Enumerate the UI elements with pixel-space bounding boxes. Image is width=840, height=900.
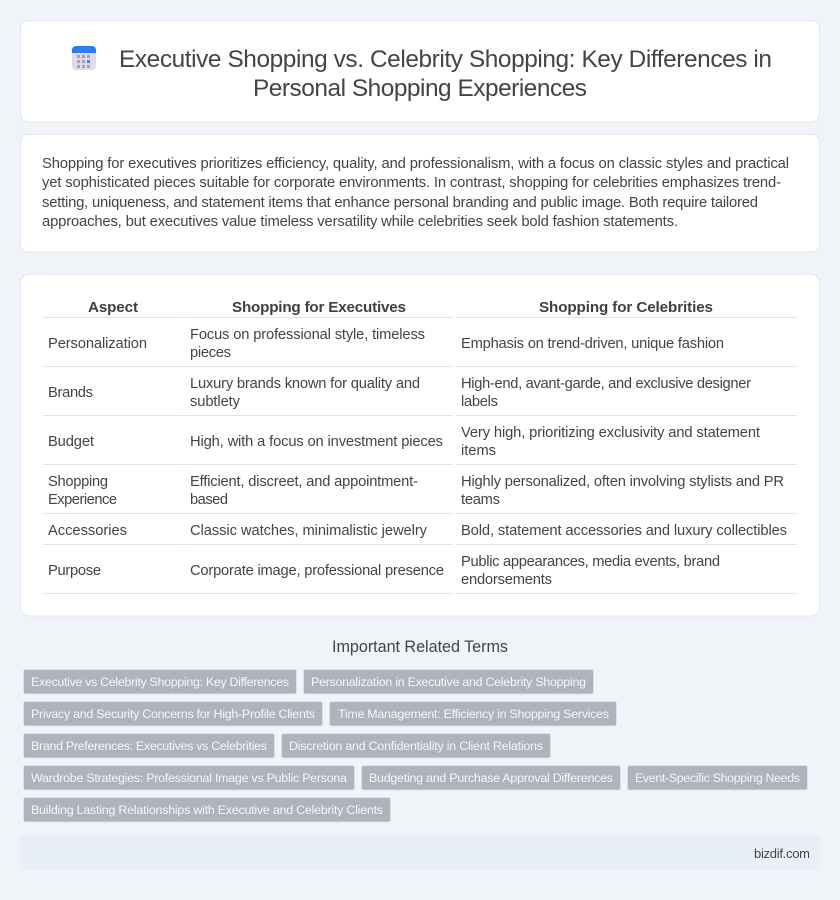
tag: Budgeting and Purchase Approval Differences [369, 771, 613, 785]
row: purpose [48, 554, 720, 588]
tag: Event-Specific Shopping Needs [635, 771, 800, 785]
table header: Shopping for Executives [232, 299, 406, 316]
tags: related terms [24, 670, 808, 822]
row: budget: High, with a focus on investment pieces [190, 434, 443, 450]
row: purpose: Corporate image, professional presence [190, 563, 444, 579]
footer [20, 836, 820, 870]
tag [330, 702, 616, 726]
tag: Discretion and Confidentiality in Client Relations [289, 739, 543, 753]
title: Executive Shopping vs. Celebrity Shopping: Key Differences in [119, 46, 772, 73]
row: brands: High-end, avant-garde, and exclusive designer [461, 376, 751, 392]
row: shopping experience: teams [461, 492, 500, 508]
row: personalization: Personalization [48, 336, 147, 352]
panel: header [20, 20, 820, 122]
text block: introduction [42, 156, 789, 230]
row: brands: subtlety [190, 394, 241, 410]
row: shopping experience: based [190, 492, 228, 508]
tag [24, 702, 322, 726]
tag: Wardrobe Strategies: Professional Image vs Public Persona [31, 771, 347, 785]
table header [88, 299, 713, 316]
row: purpose: Public appearances, media events, brand [461, 554, 720, 570]
tag [24, 670, 296, 694]
tag [282, 734, 550, 758]
tag: Personalization in Executive and Celebrity Shopping [311, 675, 586, 689]
row: brands: Brands [48, 385, 93, 401]
tag: Brand Preferences: Executives vs Celebrities [31, 739, 267, 753]
tag: Executive vs Celebrity Shopping: Key Differences [31, 675, 289, 689]
row: personalization [48, 327, 724, 361]
row: brands [48, 376, 751, 410]
footer: bizdif.com [754, 846, 810, 861]
tag: Building Lasting Relationships with Executive and Celebrity Clients [31, 803, 383, 817]
tag [362, 766, 620, 790]
row: purpose: Purpose [48, 563, 101, 579]
table header: Aspect [88, 299, 138, 316]
heading: related terms: Important Related Terms [332, 638, 508, 656]
text block: introduction: yet sophisticated pieces suitable for corporate environments. In contrast, shopping for celebrities emphasizes trend- [42, 175, 781, 191]
row: brands: labels [461, 394, 498, 410]
tag [628, 766, 808, 790]
row: personalization: Emphasis on trend-driven, unique fashion [461, 336, 724, 352]
row: shopping experience: Efficient, discreet, and appointment- [190, 474, 418, 490]
panel: introduction [20, 134, 820, 252]
text block: introduction: setting, uniqueness, and statement items that enhance personal branding and public image. Both require tailored [42, 195, 758, 211]
row: budget [48, 425, 760, 459]
tag [24, 798, 390, 822]
tag: Privacy and Security Concerns for High-Profile Clients [31, 707, 315, 721]
tag [304, 670, 594, 694]
table header: Shopping for Celebrities [539, 299, 713, 316]
row: personalization: Focus on professional style, timeless [190, 327, 425, 343]
panel: comparison table [20, 274, 820, 616]
row: accessories: Classic watches, minimalistic jewelry [190, 523, 428, 539]
tag [24, 734, 274, 758]
row: personalization: pieces [190, 345, 231, 361]
title [119, 46, 772, 102]
text block: introduction: Shopping for executives prioritizes efficiency, quality, and professionalism, with a focus on classic styles and practical [42, 156, 789, 172]
row: budget: items [461, 443, 496, 459]
tag: Time Management: Efficiency in Shopping Services [338, 707, 609, 721]
row: shopping experience: Highly personalized, often involving stylists and PR [461, 474, 784, 490]
icon: calendar [72, 46, 96, 70]
row: purpose: endorsements [461, 572, 552, 588]
row: accessories [48, 523, 787, 539]
row: shopping experience [48, 474, 784, 508]
row: budget: Budget [48, 434, 94, 450]
row: budget: Very high, prioritizing exclusivity and statement [461, 425, 760, 441]
tag [24, 766, 354, 790]
row: accessories: Bold, statement accessories and luxury collectibles [461, 523, 787, 539]
title: Personal Shopping Experiences [253, 75, 587, 102]
row: shopping experience: Shopping [48, 474, 108, 490]
row: brands: Luxury brands known for quality and [190, 376, 420, 392]
row: shopping experience: Experience [48, 492, 117, 508]
text block: introduction: approaches, but executives value timeless versatility while celebrities seek bold fashion statements. [42, 214, 678, 230]
row: accessories: Accessories [48, 523, 127, 539]
